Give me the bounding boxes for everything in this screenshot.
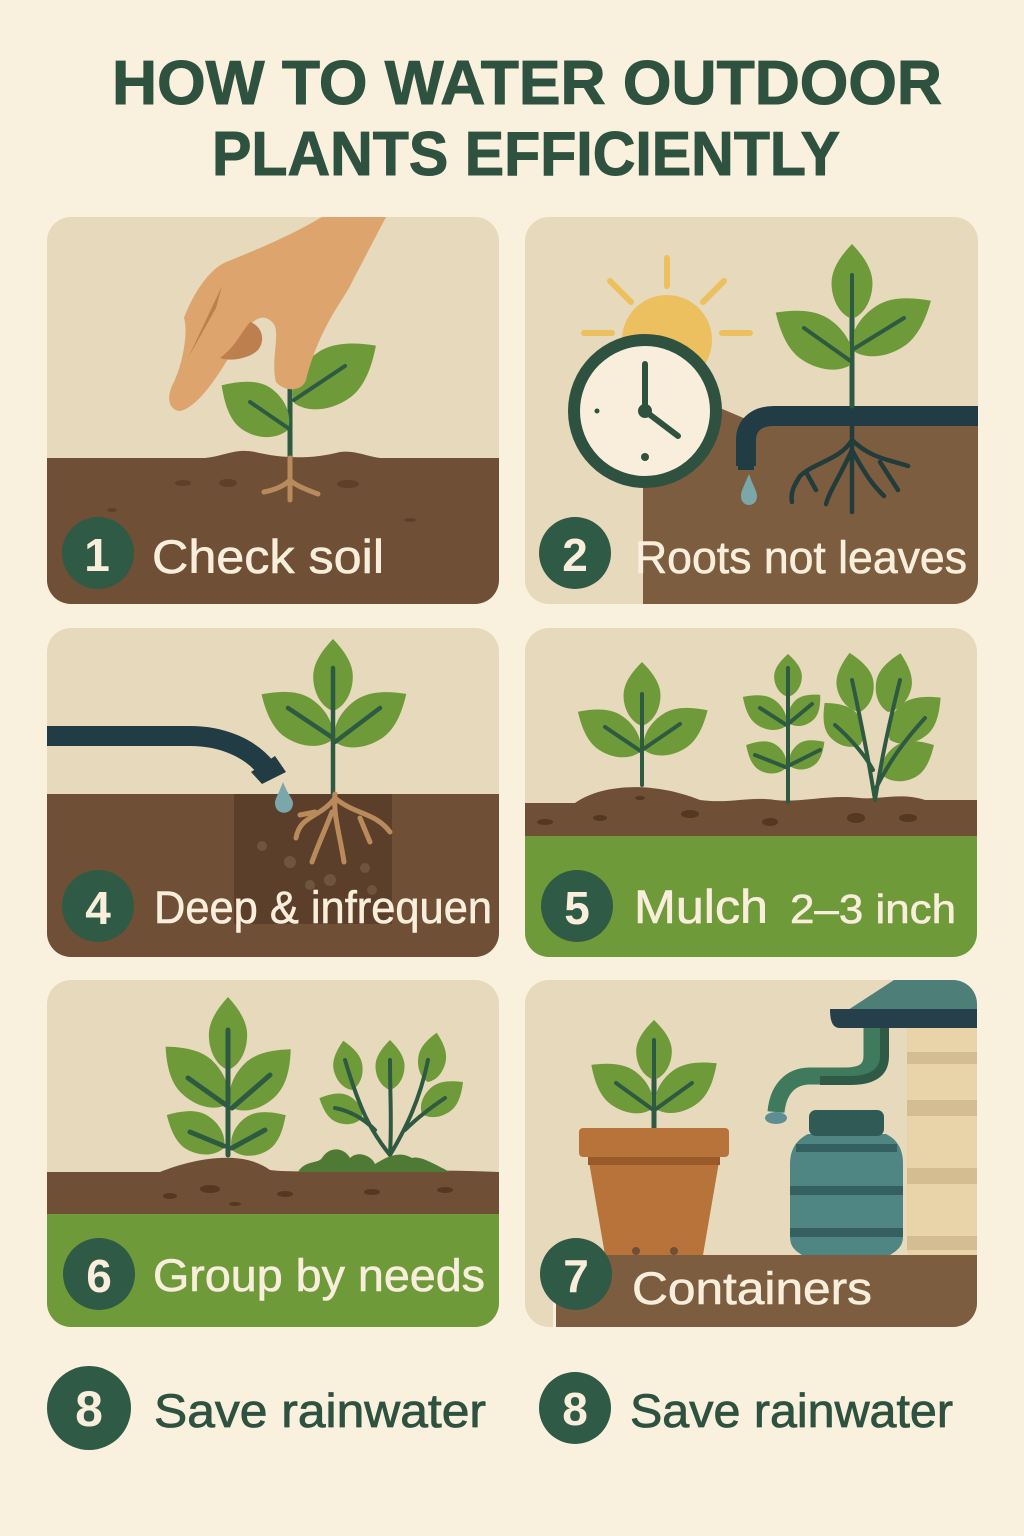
icon: rain barrel xyxy=(790,1110,903,1255)
title: HOW TO WATER OUTDOOR xyxy=(112,49,942,118)
downspout to barrel xyxy=(765,1028,889,1124)
panel: step 4 deep and infrequent xyxy=(47,628,499,957)
label: containers: Containers xyxy=(632,1263,872,1314)
step number 1: 1 xyxy=(84,529,110,581)
panel: step 7 containers xyxy=(525,980,977,1327)
soil xyxy=(556,1255,977,1327)
icon: potted plant xyxy=(579,1020,729,1255)
step number 2 xyxy=(539,517,611,589)
step 8 save rainwater left: Save rainwater xyxy=(154,1384,486,1437)
label: 2-3 inch: 2–3 inch xyxy=(790,886,956,932)
label: roots not leaves: Roots not leaves xyxy=(635,532,967,583)
grass band xyxy=(47,1212,499,1327)
step 8 save rainwater right: 8 xyxy=(562,1383,588,1435)
wet soil patch xyxy=(234,794,392,924)
step 8 save rainwater right: Save rainwater xyxy=(630,1384,953,1437)
icon: plant left xyxy=(578,662,708,787)
label: check soil: Check soil xyxy=(152,530,384,583)
mulch soil xyxy=(525,787,977,836)
step 8 save rainwater left: 8 xyxy=(75,1381,103,1437)
icon: seedling xyxy=(222,344,376,502)
soil xyxy=(47,451,499,604)
icon: large plant xyxy=(166,997,291,1158)
step number 4 xyxy=(62,870,134,942)
label: deep and infrequent: Deep & infrequen xyxy=(154,882,492,933)
step number 7: 7 xyxy=(563,1250,589,1302)
soil xyxy=(643,408,978,604)
icon: hose xyxy=(738,416,978,505)
step number 5: 5 xyxy=(564,882,590,934)
icon: plant with roots xyxy=(262,639,406,864)
step number 7 xyxy=(540,1238,612,1310)
step number 4: 4 xyxy=(85,882,111,934)
step 8 save rainwater left xyxy=(47,1366,486,1450)
step 8 save rainwater right xyxy=(539,1372,953,1444)
icon: small plant with ground cover xyxy=(298,1030,472,1172)
label: group by needs: Group by needs xyxy=(153,1250,485,1301)
roof and gutter xyxy=(830,980,977,1028)
panel: step 1 check soil xyxy=(47,217,499,604)
step number 6 xyxy=(63,1238,135,1310)
icon: sun xyxy=(581,255,753,364)
icon: plant right xyxy=(824,652,941,802)
icon: clock xyxy=(574,340,716,482)
step number 5 xyxy=(541,870,613,942)
step number 6: 6 xyxy=(86,1250,112,1302)
panel: step 6 group by needs xyxy=(47,980,499,1327)
label: mulch: Mulch xyxy=(634,880,768,933)
title xyxy=(112,49,942,189)
soil xyxy=(47,794,499,957)
icon: plant middle xyxy=(742,654,824,804)
step number 2: 2 xyxy=(562,529,588,581)
step number 1 xyxy=(62,517,134,589)
icon: plant with roots xyxy=(776,244,931,514)
title: PLANTS EFFICIENTLY xyxy=(212,120,840,189)
icon: hose xyxy=(47,736,293,813)
panel: step 5 mulch xyxy=(525,628,977,957)
icon: hand xyxy=(169,217,386,411)
house wall xyxy=(907,1028,977,1258)
soil xyxy=(47,1158,499,1214)
grass band xyxy=(525,834,977,957)
soil specks xyxy=(107,479,416,522)
panel: step 2 roots not leaves xyxy=(525,217,978,604)
